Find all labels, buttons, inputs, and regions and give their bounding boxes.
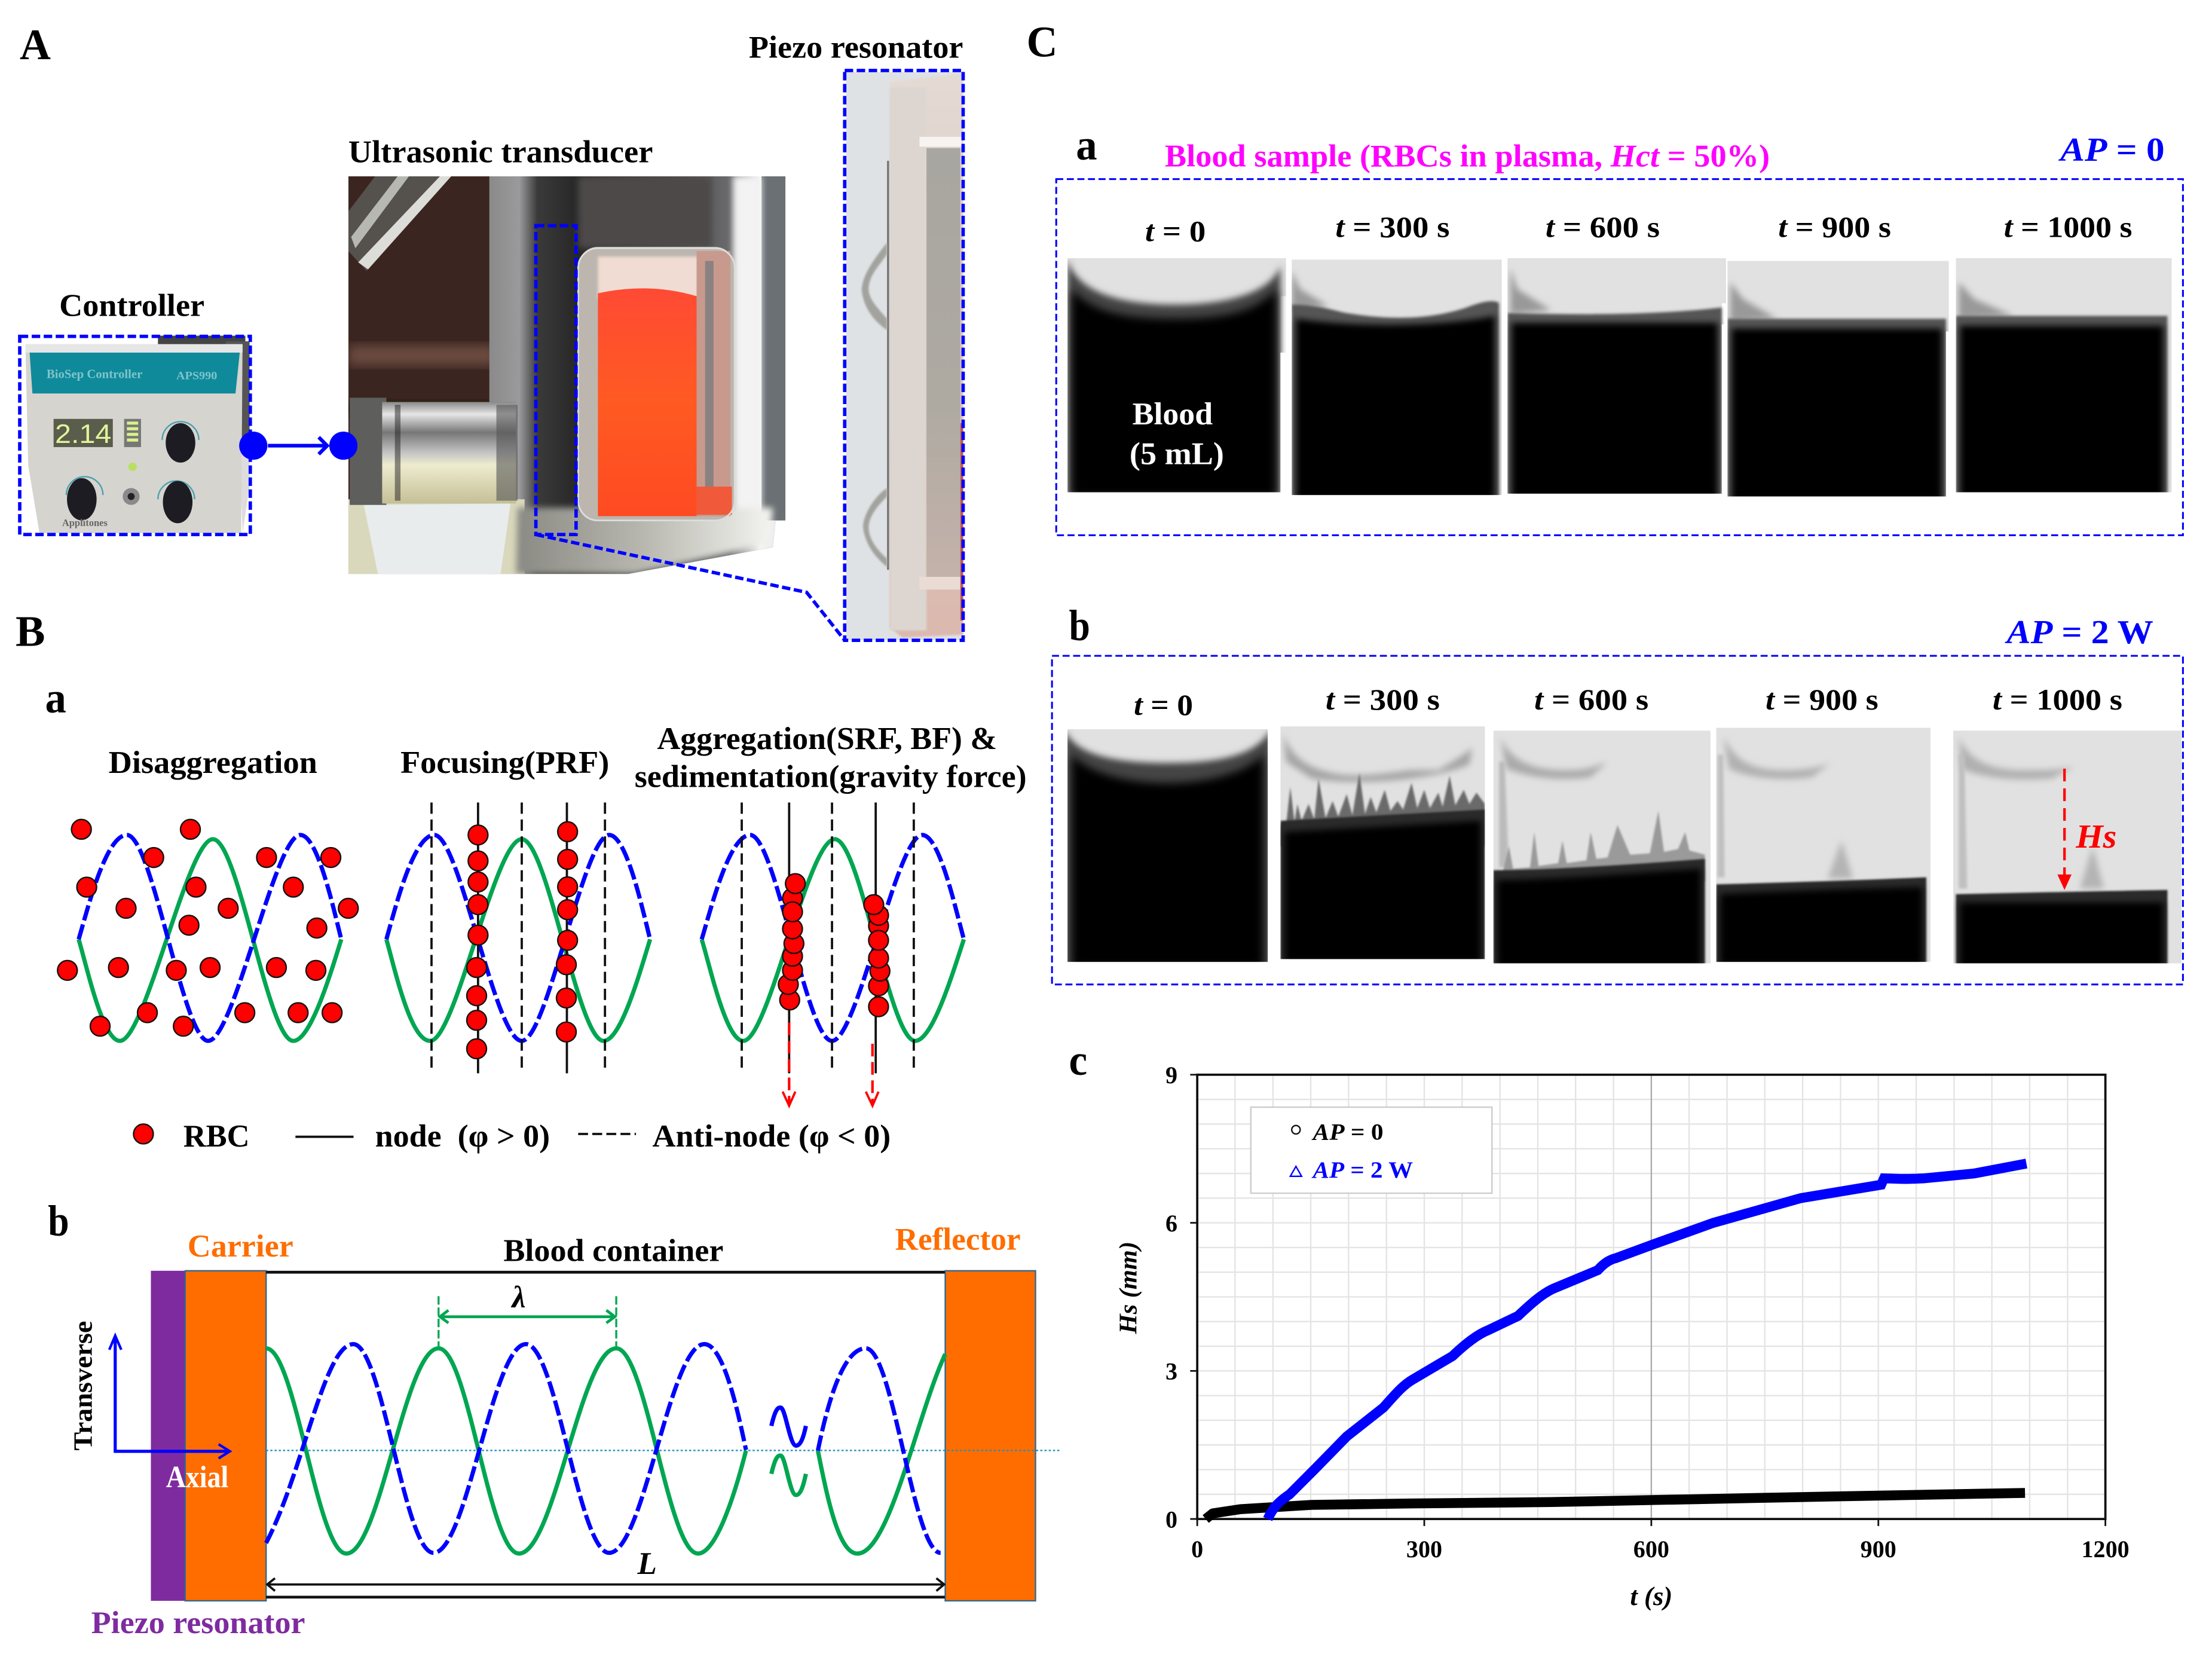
label b: b [48,1197,69,1245]
x tick labels: 1200 [2082,1536,2130,1563]
label A: A [20,20,51,69]
image: b t=600 [1494,730,1711,966]
time labels b [1134,683,2122,722]
heading: Ultrasonic transducer: Ultrasonic transducer [348,134,653,169]
axes [68,1321,230,1494]
piezo layer [151,1271,185,1601]
chart legend [1251,1107,1492,1193]
y tick labels: 6 [1165,1210,1177,1237]
photo: controller: Applitones [62,517,108,528]
carrier label: Carrier [188,1229,293,1264]
image: b t=0 [1064,729,1271,968]
image: b t=900 [1716,727,1930,965]
image: a t=300 [1292,259,1502,499]
dashed frame: controller [20,337,250,534]
legend: RBC, node, anti-node: Anti-node (φ < 0) [652,1119,891,1154]
line chart: Hs versus t [1115,1062,2130,1611]
x axis title: t (s) [1630,1581,1672,1611]
heading: Focusing(PRF): Focusing(PRF) [400,745,609,780]
label Cc: c [1069,1036,1087,1084]
diagram: focusing [386,803,650,1074]
image: a t=1000 [1956,258,2172,497]
label C: C [1027,17,1058,66]
legend: RBC, node, anti-node: RBC [183,1119,250,1154]
reflector block [946,1271,1036,1601]
image: a t=600 [1507,258,1726,498]
time labels b: t = 1000 s [1993,683,2122,716]
Hs arrow and label [2057,769,2117,890]
wavelength marker: λ [510,1280,526,1314]
sample title: Blood sample (RBCs in plasma, Hct = 50%) [1165,139,1770,173]
panel C: sedimentation results [1027,17,2183,1611]
y tick labels: 3 [1165,1358,1177,1385]
photo: controller [20,336,250,534]
time labels b: t = 600 s [1534,683,1648,716]
heading: Disaggregation: Disaggregation [109,745,317,780]
label Ca: a [1076,121,1097,169]
label Cb: b [1069,601,1090,650]
image: a t=900 [1727,261,1949,501]
legend: RBC, node, anti-node [133,1119,891,1154]
zoom connector [536,534,845,640]
piezo resonator label: Piezo resonator [91,1606,305,1640]
x tick labels: 300 [1406,1536,1442,1563]
time labels b: t = 300 s [1326,683,1440,716]
time labels b: t = 900 s [1766,683,1878,716]
x tick labels: 0 [1191,1536,1203,1563]
heading: sedimentation: sedimentation(gravity force) [635,760,1027,794]
label a: a [45,674,66,722]
heading: Piezo resonator: Piezo resonator [749,30,963,65]
chart legend: AP = 2 W [1311,1157,1413,1183]
centre line [266,1450,1060,1451]
panel B: acoustic principle [16,607,1060,1640]
y tick labels: 0 [1165,1506,1177,1533]
wave: green [266,1349,946,1554]
heading: Controller: Controller [59,289,204,323]
Hs arrow and label: Hs [2075,818,2117,855]
wave: blue dashed [266,1344,941,1553]
photo: controller: 2.14 [55,419,111,449]
axes: Axial [166,1460,228,1494]
image: b t=300 [1280,726,1485,962]
photo: piezo resonator [846,72,963,640]
series: AP = 2 W [1268,1164,2026,1519]
blood volume label: (5 mL) [1130,436,1224,471]
dashed frame: piezo resonator [845,71,963,640]
time labels a: t = 0 [1145,215,1206,247]
wavelength marker [439,1280,616,1347]
time labels a: t = 600 s [1546,210,1660,243]
length marker: L [637,1546,657,1581]
time labels a: t = 300 s [1335,210,1449,243]
chart legend: AP = 0 [1311,1119,1384,1145]
AP = 0: AP = 0 [2058,132,2165,169]
connection arrow [239,432,357,460]
legend: RBC, node, anti-node: node (φ > 0) [375,1119,550,1154]
time labels b: t = 0 [1134,689,1193,722]
carrier block [185,1271,266,1601]
diagram: disaggregation [57,820,358,1041]
container walls [266,1272,945,1597]
diagram: standing wave in resonator [68,1222,1060,1640]
photo: controller: BioSep Controller [47,366,142,381]
image: a t=0 [1067,258,1286,497]
time labels a: t = 1000 s [2004,210,2132,243]
series: AP = 0 [1206,1493,2025,1519]
x tick labels: 900 [1861,1536,1896,1563]
dashed frame: resonator location [536,226,576,534]
axes: Transverse [68,1321,97,1451]
x tick labels: 600 [1633,1536,1669,1563]
AP = 2 W: AP = 2 W [2005,614,2153,651]
time labels a: t = 900 s [1778,210,1891,243]
y axis title: Hs (mm) [1115,1242,1143,1334]
dashed frame b [1052,656,2183,985]
y tick labels: 9 [1165,1062,1177,1089]
x tick labels [1191,1536,2130,1563]
photo: ultrasonic transducer [348,176,790,574]
panel A: experimental setup [20,20,963,640]
blood container label: Blood container [503,1233,723,1268]
blood label: Blood [1133,397,1213,432]
label B: B [16,607,45,656]
time labels a [1145,210,2132,247]
reflector label: Reflector [895,1222,1021,1257]
y tick labels [1165,1062,1177,1533]
heading: Aggregation: Aggregation(SRF, BF) & [657,722,997,756]
image: b t=1000 [1953,730,2182,966]
dashed frame a [1056,179,2183,535]
length marker [267,1546,944,1591]
diagram: aggregation and sedimentation [702,803,964,1106]
photo: controller: APS990 [176,370,217,383]
